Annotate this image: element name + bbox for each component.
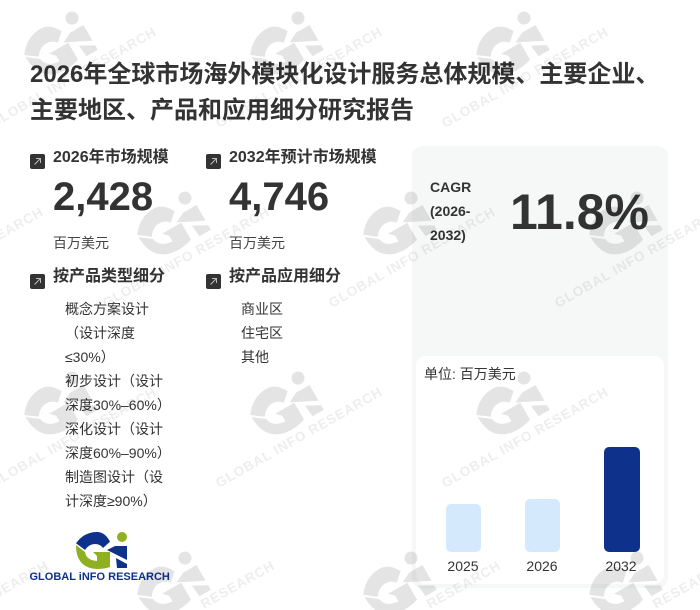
watermark: GLOBAL INFO RESEARCH [439, 384, 611, 491]
value: 2,428 [53, 175, 153, 219]
CAGR value: 11.8% [510, 184, 649, 240]
list: product types: 深度60%–90%） [65, 445, 171, 461]
panel: by product type [30, 267, 171, 509]
unit: 百万美元 [53, 235, 109, 251]
CAGR label: 2032) [430, 227, 466, 243]
logo mark [76, 532, 127, 569]
list: product types: 计深度≥90%） [65, 493, 157, 509]
CAGR label [430, 179, 471, 243]
title [30, 61, 659, 124]
CAGR label: (2026- [430, 203, 470, 219]
heading: 按产品类型细分 [53, 268, 165, 285]
panel: bar chart card [416, 356, 664, 584]
list: product types: 制造图设计（设 [65, 469, 163, 485]
logo: Global Info Research [30, 532, 170, 583]
icon: arrow [206, 274, 221, 289]
panel: CAGR card [412, 146, 668, 588]
label 2026: 2026 [526, 558, 558, 574]
list: product types: （设计深度 [65, 325, 135, 341]
value: 4,746 [229, 175, 329, 219]
list: product types: 概念方案设计 [65, 301, 149, 317]
unit: 百万美元 [229, 235, 285, 251]
bar 2025 [446, 504, 481, 552]
list: applications: 其他 [241, 349, 269, 365]
watermark: RESEARCH [198, 558, 277, 610]
bar 2026 [525, 498, 560, 552]
icon: arrow [206, 154, 221, 169]
icon: arrow [30, 154, 45, 169]
list: product types [65, 301, 171, 509]
panel: market size 2032 [206, 148, 377, 251]
title: 2026年全球市场海外模块化设计服务总体规模、主要企业、 [30, 61, 659, 88]
watermark: RESEARCH [424, 558, 503, 610]
heading: 2026年市场规模 [53, 149, 169, 166]
heading: 按产品应用细分 [229, 268, 341, 285]
watermark: GLOBAL INFO RESEARCH [439, 24, 611, 131]
panel: by application [206, 267, 341, 365]
watermark: GLOBAL INFO RESEARCH [100, 204, 272, 311]
list: applications: 住宅区 [241, 325, 283, 341]
label 2032: 2032 [605, 558, 637, 574]
watermark: GLOBAL INFO RESEARCH [326, 204, 498, 311]
list: product types: ≤30%） [65, 349, 115, 365]
logo wordmark: GLOBAL iNFO RESEARCH [30, 571, 170, 583]
panel: market size 2026 [30, 148, 169, 251]
list: applications [241, 301, 283, 365]
watermark: GLOBAL INFO RESEARCH [213, 384, 385, 491]
watermark: GLOBAL INFO RESEARCH [213, 24, 385, 131]
label 2025: 2025 [447, 558, 479, 574]
bar 2032 [604, 447, 640, 552]
title: 主要地区、产品和应用细分研究报告 [30, 97, 414, 124]
list: product types: 深度30%–60%） [65, 397, 171, 413]
list: product types: 初步设计（设计 [65, 373, 163, 389]
list: product types: 深化设计（设计 [65, 421, 163, 437]
unit label: 单位: 百万美元 [424, 366, 516, 382]
list: applications: 商业区 [241, 301, 283, 317]
icon: arrow [30, 274, 45, 289]
CAGR label: CAGR [430, 179, 471, 195]
bar chart [446, 447, 640, 574]
heading: 2032年预计市场规模 [229, 149, 377, 166]
